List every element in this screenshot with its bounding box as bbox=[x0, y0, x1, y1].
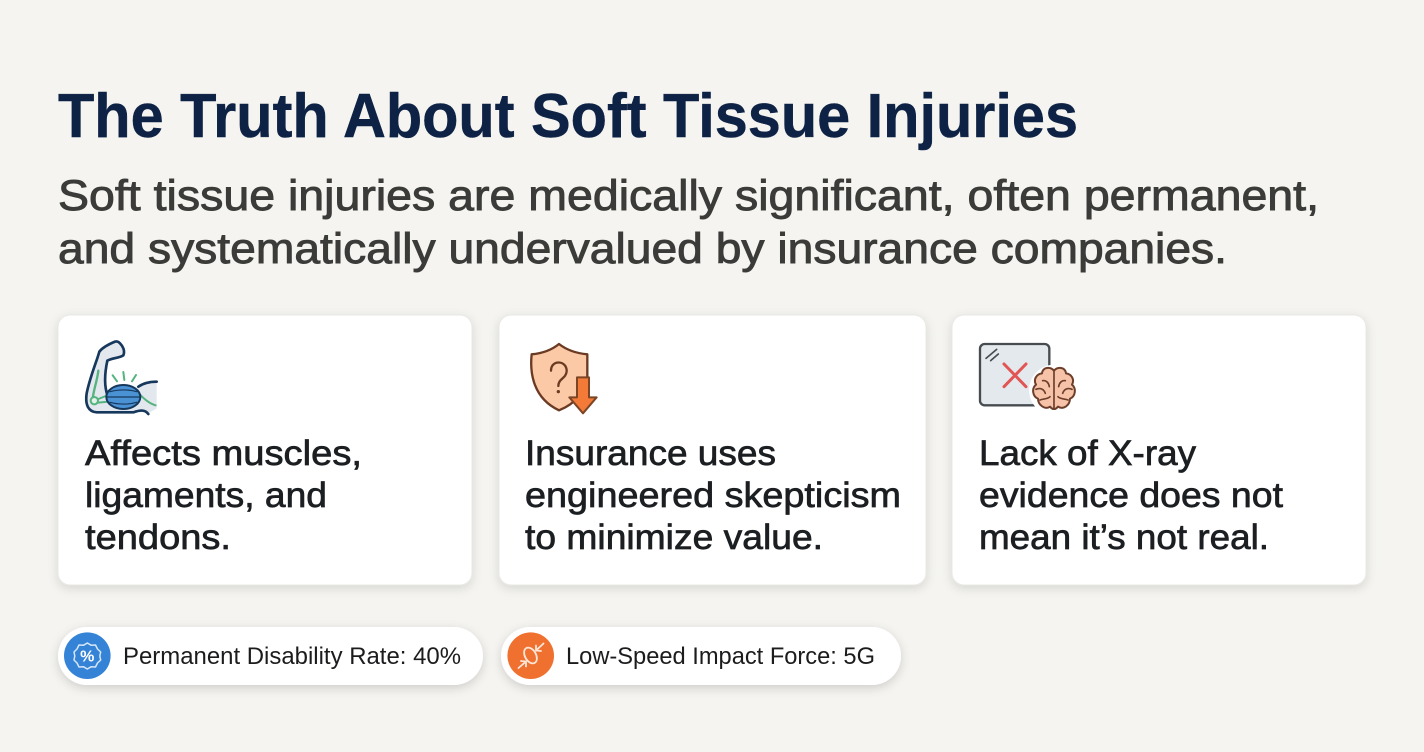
icon: impact compression arrows bbox=[507, 632, 554, 679]
card text: insurance: Insurance uses bbox=[525, 434, 776, 473]
panel: insurance card bbox=[499, 315, 926, 585]
card text: muscles bbox=[85, 434, 362, 557]
icon: shield with question mark and down arrow bbox=[531, 344, 597, 413]
stat pill: permanent disability rate bbox=[58, 627, 483, 685]
icon: percent badge: % bbox=[80, 648, 94, 666]
icon: percent badge bbox=[64, 632, 111, 679]
subtitle: and systematically undervalued by insurance companies. bbox=[58, 225, 1227, 273]
panel: x-ray card bbox=[952, 315, 1366, 585]
icon: x-ray film with brain bbox=[980, 344, 1080, 415]
card text: insurance bbox=[525, 434, 901, 557]
card text: x-ray bbox=[979, 434, 1283, 557]
card text: insurance: to minimize value. bbox=[525, 518, 823, 557]
card text: muscles: ligaments, and bbox=[85, 476, 327, 515]
card text: x-ray: mean it’s not real. bbox=[979, 518, 1269, 557]
pill label: Permanent Disability Rate: 40% bbox=[123, 643, 461, 670]
card text: x-ray: evidence does not bbox=[979, 476, 1283, 515]
stat pill: low-speed impact force bbox=[501, 627, 901, 685]
pill label: Low-Speed Impact Force: 5G bbox=[566, 643, 875, 670]
panel: muscles card bbox=[58, 315, 472, 585]
subtitle: Soft tissue injuries are medically significant, often permanent, bbox=[58, 172, 1319, 220]
icon: flexed arm muscle bbox=[86, 341, 157, 414]
card text: muscles: tendons. bbox=[85, 518, 231, 557]
card text: insurance: engineered skepticism bbox=[525, 476, 901, 515]
card text: muscles: Affects muscles, bbox=[85, 434, 362, 473]
title: The Truth About Soft Tissue Injuries bbox=[58, 82, 1078, 151]
card text: x-ray: Lack of X-ray bbox=[979, 434, 1197, 473]
subtitle bbox=[58, 172, 1319, 273]
